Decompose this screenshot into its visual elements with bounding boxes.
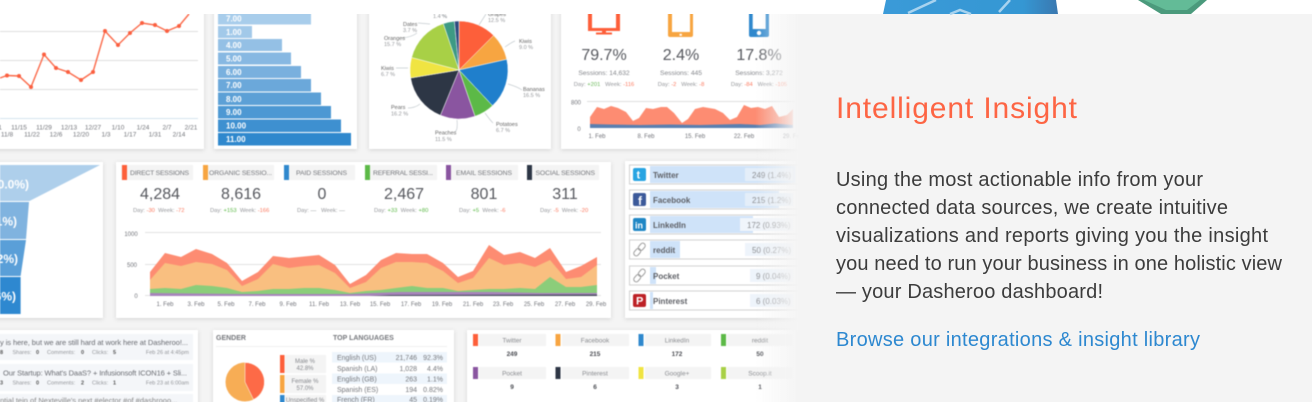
x axis labels: 11/29 xyxy=(36,124,52,132)
stacked area chart: 5. Feb xyxy=(217,302,235,308)
panel: horizontal bar list: 6.00 xyxy=(226,68,242,77)
pie labels: Oranges xyxy=(384,36,405,42)
panel: social posts: 2 xyxy=(81,380,84,386)
row: Pinterest: P xyxy=(636,296,643,308)
panel: share counts: 50 xyxy=(756,351,764,358)
row: Pocket: Pocket xyxy=(653,272,680,281)
panel: social posts: Clicks: xyxy=(92,350,109,356)
row: Pinterest: Pinterest xyxy=(653,297,688,306)
row: reddit: reddit xyxy=(653,246,676,255)
panel: share counts: Pocket xyxy=(502,370,522,378)
stacked area chart: 3. Feb xyxy=(187,302,205,308)
panel: social posts: 0 xyxy=(36,380,39,386)
device stats: 17.8% xyxy=(736,47,782,64)
panel: social posts: Comments: xyxy=(47,350,76,356)
top strip with cropped decorative icons xyxy=(0,0,1312,14)
panel: social posts: 1 xyxy=(113,380,116,386)
pie labels: 6.7 % xyxy=(381,72,395,78)
body text: you need to run your business in one holistic view xyxy=(836,253,1283,275)
metric tags: DIRECT SESSIONS xyxy=(130,170,189,177)
stacked area chart: 29. Feb xyxy=(586,302,607,308)
stacked area chart: 11. Feb xyxy=(309,302,330,308)
pie labels: 3.7 % xyxy=(403,28,417,34)
metric values: Day: -5 Week: -20 xyxy=(540,208,588,214)
pie labels: 16.5 % xyxy=(523,93,540,99)
pie labels: 9.0 % xyxy=(519,45,533,51)
device area chart: 1. Feb xyxy=(588,134,606,140)
stacked area chart xyxy=(124,232,607,308)
row: LinkedIn: 172 (0.93%) xyxy=(747,221,791,230)
pie labels: Pears xyxy=(391,105,406,111)
stacked area chart: 15. Feb xyxy=(370,302,391,308)
panel: social posts: Our Startup: What's DaaS? + Infusionsoft ICON16 + Sli... xyxy=(3,368,187,378)
icon: cropped blue circle xyxy=(883,0,1058,14)
x axis labels: 12/27 xyxy=(85,124,102,132)
metric values: Day: -30 Week: -72 xyxy=(133,208,184,214)
right background with fade edge xyxy=(755,14,1312,402)
metric values: 4,284 xyxy=(140,186,180,203)
x axis labels: 11/22 xyxy=(24,132,40,138)
metric tags: EMAIL SESSIONS xyxy=(456,170,512,177)
device area chart: 8. Feb xyxy=(637,134,655,140)
panel: horizontal bar list xyxy=(214,10,357,149)
gender legend xyxy=(280,355,326,402)
device stats: Day: -2 Week: -8 xyxy=(658,82,704,88)
panel: share counts: Scoop.it xyxy=(748,370,772,378)
row: Facebook xyxy=(630,190,810,209)
languages table: 1,028 xyxy=(399,366,417,373)
panel: share counts: 3 xyxy=(675,384,679,391)
panel: horizontal bar list: 8.00 xyxy=(226,95,242,104)
panel: social posts: Feb 26 at 4:45pm xyxy=(146,350,189,356)
pie labels: 12.5 % xyxy=(488,18,505,24)
languages table: Spanish (LA) xyxy=(337,366,377,373)
panel: horizontal bar list: 10.00 xyxy=(226,122,247,130)
languages table: 92.3% xyxy=(423,355,443,362)
languages table: 263 xyxy=(405,376,417,384)
panel: horizontal bar list: 11.00 xyxy=(226,135,246,144)
panel: share counts: Facebook xyxy=(581,338,610,344)
metric values: 0 xyxy=(318,186,327,203)
metric tags: ORGANIC SESSIO... xyxy=(209,170,272,177)
gender legend: 42.8% xyxy=(296,366,314,372)
gender pie xyxy=(226,362,264,402)
device area chart: 15. Feb xyxy=(685,134,706,140)
languages table xyxy=(332,352,447,402)
panel: traffic sessions xyxy=(116,162,611,318)
row: Facebook: Facebook xyxy=(653,196,691,205)
metric values: 801 xyxy=(471,186,497,203)
panel: pie chart xyxy=(369,10,551,149)
stacked area chart: 1. Feb xyxy=(156,302,174,308)
body text: visualizations and reports giving you the insight xyxy=(836,225,1268,247)
panel: social posts: y is here, but we are still hard at work here at Dasheroo!... xyxy=(0,338,188,347)
panel: share counts: 1 xyxy=(758,384,762,391)
panel: share counts: Google+ xyxy=(665,370,690,378)
body text: connected data sources, we create intuitive xyxy=(836,197,1228,219)
pie labels: 11.5 % xyxy=(435,137,452,143)
x axis labels: 1/17 xyxy=(124,132,137,138)
row: reddit xyxy=(630,240,810,259)
device stats: Sessions: 445 xyxy=(660,70,702,77)
x axis labels: 1/3 xyxy=(101,132,111,138)
panel: share counts: 9 xyxy=(510,384,514,391)
device area chart: 0 xyxy=(577,127,581,133)
device stats: Day: +201 Week: -116 xyxy=(574,82,634,88)
x axis labels: 2/7 xyxy=(162,124,172,132)
stacked area chart: 17. Feb xyxy=(401,302,422,308)
panel: social posts: 3 xyxy=(0,380,3,386)
gender legend: 57.0% xyxy=(296,386,314,392)
x axis labels: 12/13 xyxy=(61,124,78,132)
row: Pocket: 9 (0.04%) xyxy=(756,272,791,281)
metric values: Day: +153 Week: -166 xyxy=(210,208,269,214)
device stats: Sessions: 14,632 xyxy=(578,70,630,77)
panel: social posts: Comments: xyxy=(47,380,76,386)
x axis labels: 2/14 xyxy=(173,132,186,138)
row: Pinterest xyxy=(630,291,810,310)
panel: horizontal bar list: 4.00 xyxy=(226,41,242,50)
metric values: 2,467 xyxy=(384,186,424,203)
stacked area chart: 13. Feb xyxy=(340,302,361,308)
pie labels: 16.2 % xyxy=(391,112,408,118)
row: reddit: 50 (0.27%) xyxy=(752,246,791,255)
row: Twitter: Twitter xyxy=(653,171,679,180)
dashboard collage xyxy=(0,10,821,402)
stacked area chart: 25. Feb xyxy=(524,302,545,308)
link: Browse our integrations & insight library xyxy=(836,329,1200,351)
metric tags: SOCIAL SESSIONS xyxy=(536,170,595,177)
x axis labels: 12/20 xyxy=(73,132,90,138)
panel: social shares xyxy=(625,161,820,318)
body text: Using the most actionable info from your xyxy=(836,169,1203,191)
gender legend: Female % xyxy=(291,379,319,385)
icon: cropped green shape xyxy=(1138,0,1207,14)
languages table: Spanish (ES) xyxy=(337,387,378,394)
panel: share counts: Pinterest xyxy=(582,370,608,378)
x axis labels: 2/21 xyxy=(185,124,198,132)
panel: social posts: 0 xyxy=(81,350,84,356)
metric values: Day: +33 Week: +80 xyxy=(374,208,428,214)
panel: gender and top languages xyxy=(213,330,454,402)
panel: horizontal bar list: 7.00 xyxy=(226,81,242,90)
pie labels: Dates xyxy=(403,22,418,28)
device area chart: 800 xyxy=(571,100,582,106)
panel: social posts: 5 xyxy=(113,350,116,356)
metric values: 311 xyxy=(552,186,578,203)
x axis labels: 1/10 xyxy=(112,124,125,132)
languages table: English (US) xyxy=(337,355,376,362)
panel: device sessions xyxy=(561,10,821,149)
panel: social posts: 0 xyxy=(36,350,39,356)
panel: share counts: LinkedIn xyxy=(665,338,690,344)
heading: Intelligent Insight xyxy=(836,92,1078,125)
row: LinkedIn: LinkedIn xyxy=(653,221,686,230)
device area chart: 29. Feb xyxy=(783,134,804,140)
languages table: 21,746 xyxy=(396,355,417,362)
pie labels: Kiwis xyxy=(519,39,532,45)
row: Twitter: 249 (1.4%) xyxy=(752,171,791,180)
x axis labels: 12/6 xyxy=(50,132,63,138)
row: Pocket xyxy=(630,266,810,285)
gender legend: Male % xyxy=(295,359,316,365)
device area chart xyxy=(571,100,804,140)
metric tags: PAID SESSIONS xyxy=(296,170,347,177)
metric values: 8,616 xyxy=(221,186,261,203)
device stats: 2.4% xyxy=(663,47,699,64)
panel: social posts xyxy=(0,330,198,402)
panel: share counts: Twitter xyxy=(502,338,522,344)
pie labels: Bananas xyxy=(523,87,545,93)
languages table: English (GB) xyxy=(337,376,377,384)
languages table: 194 xyxy=(405,387,417,394)
device area chart: 22. Feb xyxy=(734,134,755,140)
stacked area chart: 1000 xyxy=(124,232,138,238)
panel: social posts: Shares: xyxy=(12,350,32,356)
panel: line chart xyxy=(0,10,204,149)
stacked area chart: 27. Feb xyxy=(555,302,576,308)
device stats: Day: -84 Week: -105 xyxy=(731,82,787,88)
panel: horizontal bar list: 1.00 xyxy=(226,28,242,37)
metric values: Day: — Week: — xyxy=(297,208,345,214)
row: Facebook: 215 (1.2%) xyxy=(752,196,791,205)
line series xyxy=(0,14,189,89)
icon: tablet xyxy=(668,10,693,37)
pie labels: Peaches xyxy=(435,130,457,136)
panel: social posts: Shares: xyxy=(12,380,32,386)
row: Facebook: f xyxy=(638,194,643,208)
languages table: 0.82% xyxy=(423,387,443,394)
x axis labels: 11/15 xyxy=(11,124,27,132)
panel: horizontal bar list: 5.00 xyxy=(226,54,242,64)
metric tags xyxy=(121,165,599,180)
panel: share counts: 249 xyxy=(507,351,518,358)
metric values xyxy=(133,186,588,214)
panel: funnel xyxy=(0,162,103,318)
panel: share counts: 6 xyxy=(593,384,597,391)
x axis labels xyxy=(0,124,198,138)
x axis labels: 1/24 xyxy=(137,124,150,132)
languages table: 4.4% xyxy=(427,366,443,373)
x axis labels: 11/8 xyxy=(1,132,13,138)
panel: social posts: 8 xyxy=(0,350,3,356)
stacked area chart: 23. Feb xyxy=(493,302,514,308)
stacked area chart: 9. Feb xyxy=(279,302,297,308)
pie labels: 1.4 % xyxy=(433,14,447,20)
metric tags: REFERRAL SESSI... xyxy=(373,170,433,177)
device stats: 79.7% xyxy=(581,47,627,64)
row: Pinterest: 6 (0.03%) xyxy=(756,297,791,306)
panel: share counts xyxy=(467,330,797,402)
pie labels xyxy=(381,12,545,143)
stacked area chart: 7. Feb xyxy=(248,302,266,308)
panel: gender and top languages: GENDER xyxy=(216,335,246,342)
panel: social posts: Clicks: xyxy=(92,380,109,386)
stacked area chart: 0 xyxy=(134,294,138,300)
stacked area chart: 21. Feb xyxy=(463,302,484,308)
row: LinkedIn: in xyxy=(635,220,643,230)
body text: — your Dasheroo dashboard! xyxy=(836,281,1103,303)
pie labels: Potatoes xyxy=(496,122,518,128)
stacked area chart: 500 xyxy=(127,263,138,269)
panel: horizontal bar list: 7.00 xyxy=(226,14,242,24)
panel: gender and top languages: TOP LANGUAGES xyxy=(333,335,394,342)
pie slices xyxy=(410,21,508,119)
panel: horizontal bar list: 9.00 xyxy=(226,108,242,117)
row: Twitter: t xyxy=(636,170,640,182)
pie labels: 6.7 % xyxy=(496,128,510,134)
icon: monitor xyxy=(588,10,620,34)
icon: phone xyxy=(749,10,769,37)
panel: share counts: reddit xyxy=(752,338,768,344)
body text xyxy=(836,169,1283,303)
device stats xyxy=(574,47,787,88)
languages table: 1.1% xyxy=(427,376,443,384)
panel: social posts: Feb 23 at 6:00am xyxy=(146,380,189,386)
panel: share counts: 172 xyxy=(672,351,683,358)
panel: share counts: 215 xyxy=(590,351,601,358)
pie labels: 15.7 % xyxy=(384,42,401,48)
pie labels: Grapes xyxy=(488,12,506,18)
row: LinkedIn xyxy=(630,215,810,234)
x axis labels: 1/31 xyxy=(149,132,162,138)
stacked area chart: 19. Feb xyxy=(432,302,453,308)
pie labels: Kiwis xyxy=(381,66,394,72)
metric values: Day: +5 Week: -6 xyxy=(459,208,505,214)
device stats: Sessions: 3,272 xyxy=(735,70,783,77)
row: Twitter xyxy=(630,165,810,184)
